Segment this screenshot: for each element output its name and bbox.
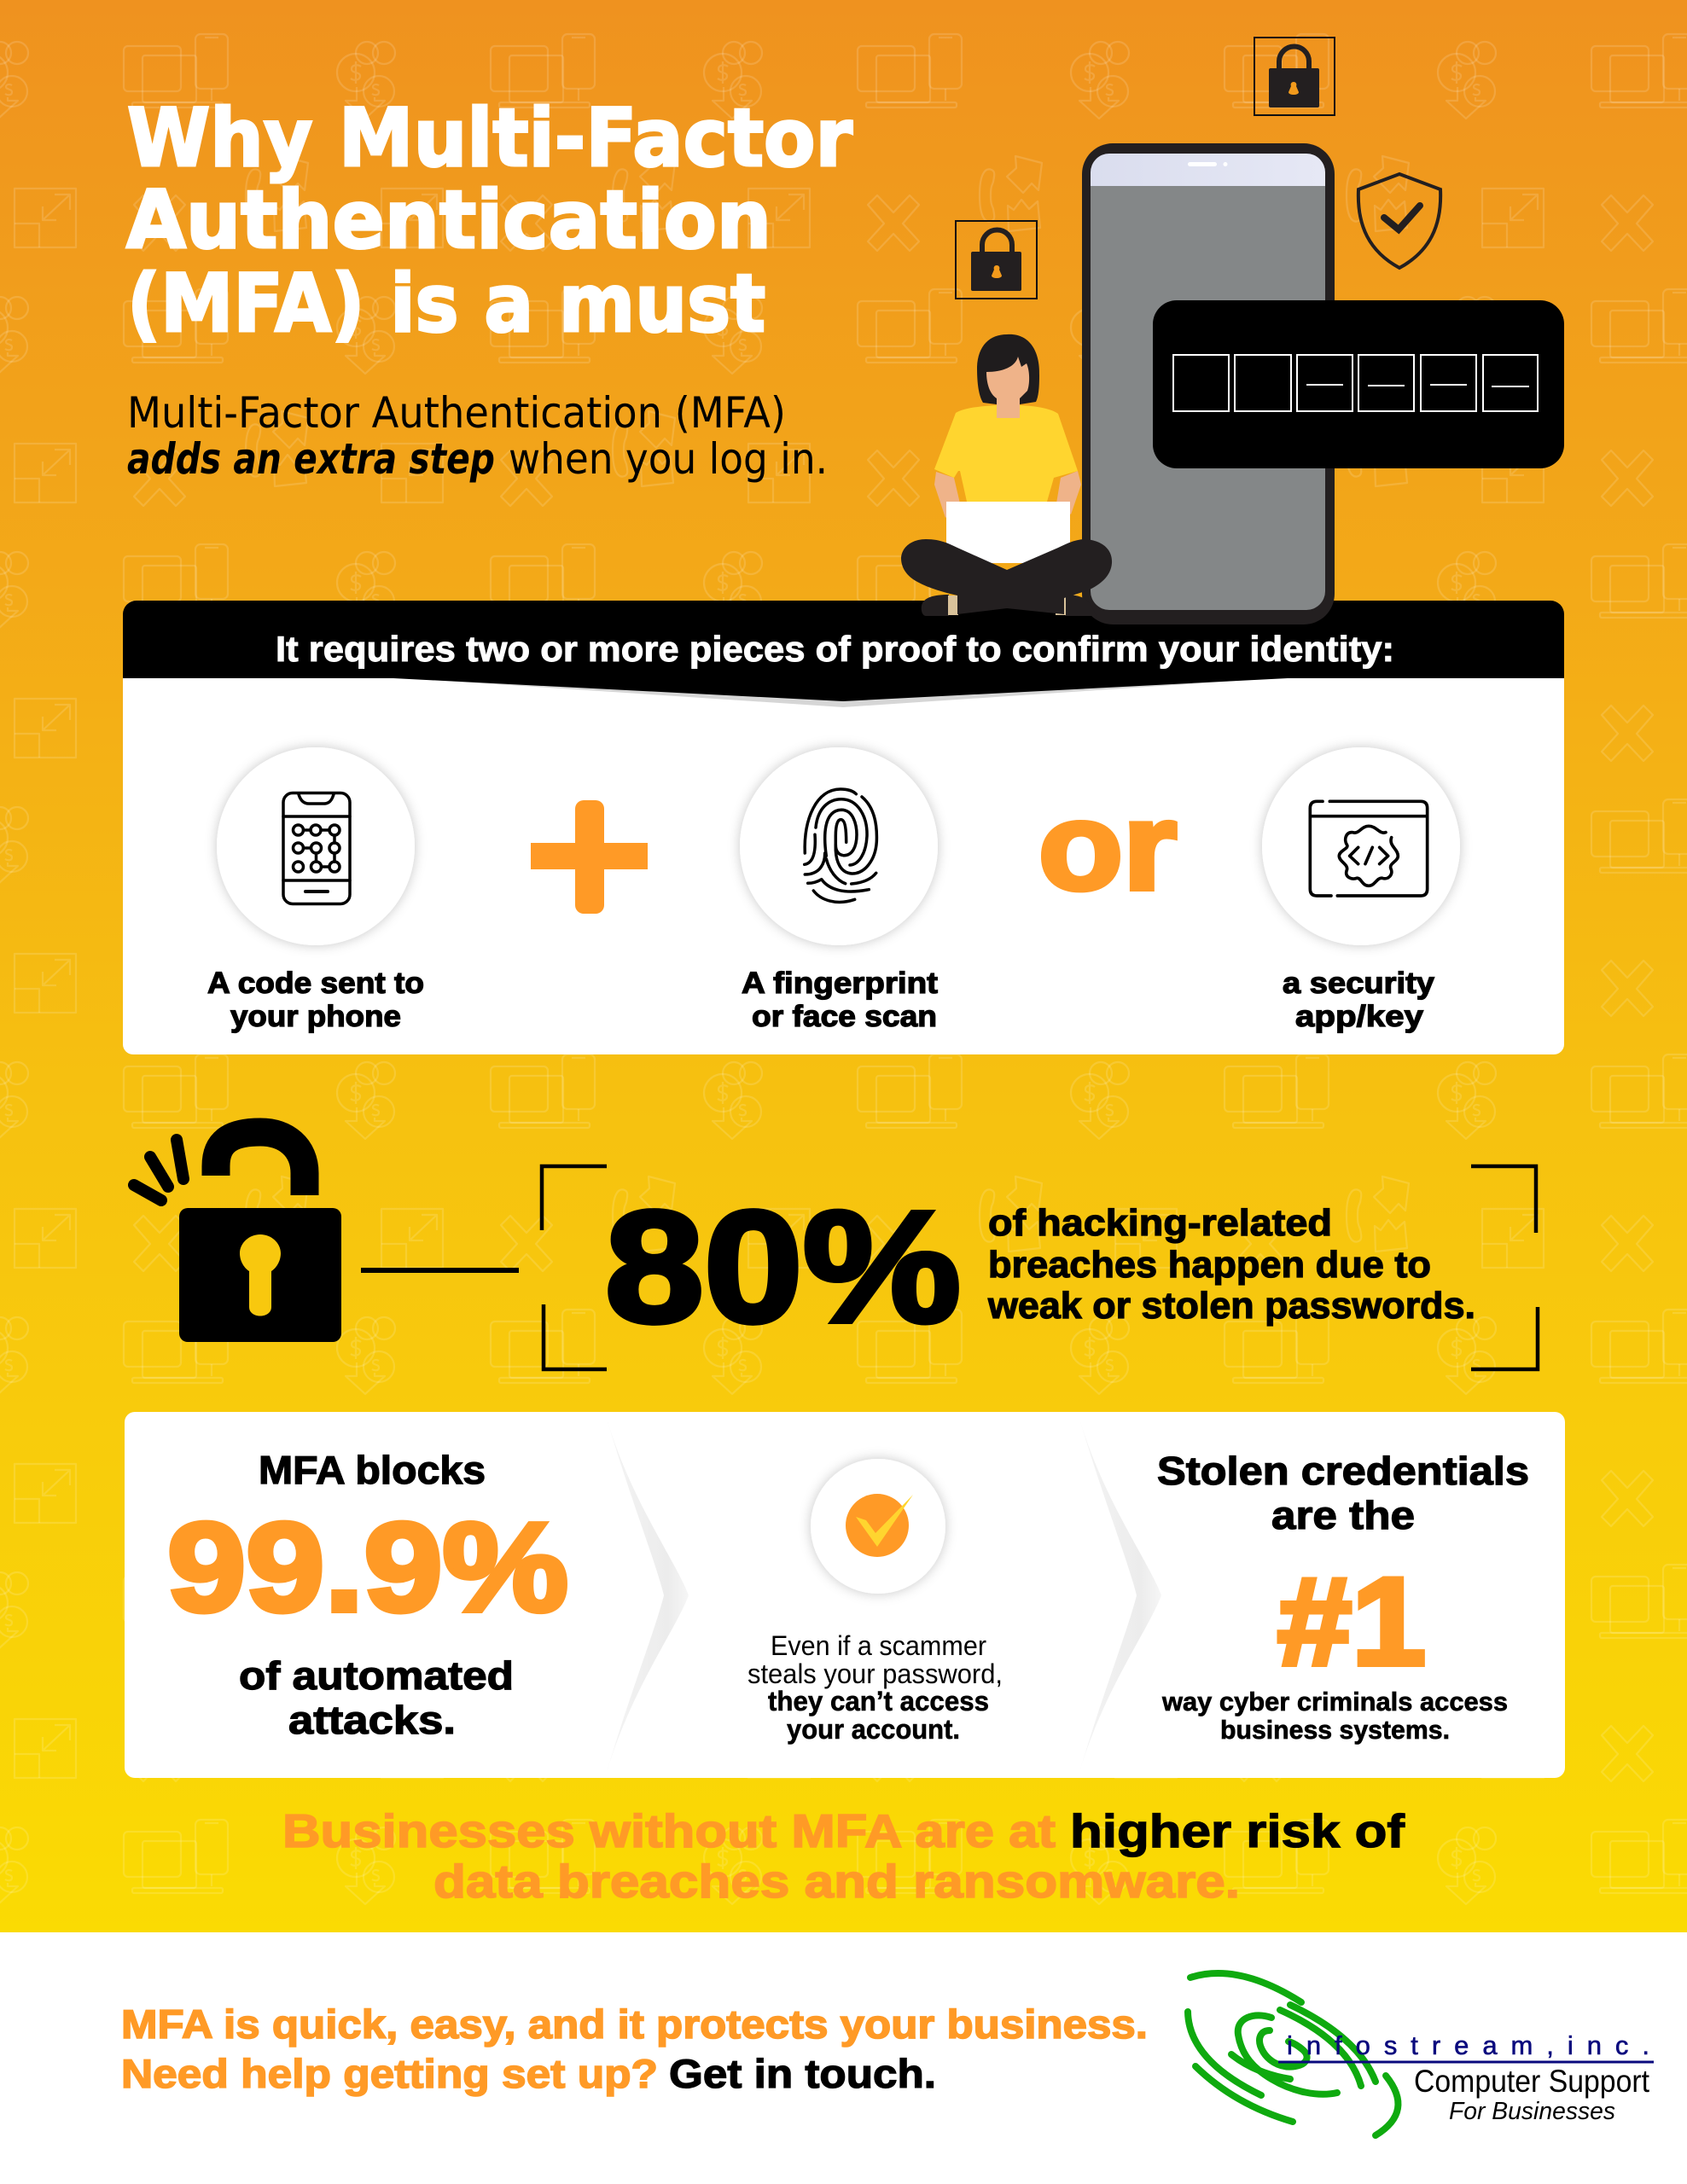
icon: padlock left [956, 221, 1037, 299]
stat: MFA blocks 99.9%: attacks. [288, 1698, 456, 1742]
stat: stolen credentials #1: Stolen credentials [1157, 1449, 1529, 1493]
stat text: hacking-related breaches: weak or stolen passwords. [987, 1285, 1475, 1327]
title: Why Multi-Factor [127, 92, 853, 185]
subtitle: adds an extra step [127, 434, 495, 484]
factor labels: your phone [230, 1000, 401, 1033]
stat: 80%: 80% [605, 1179, 961, 1356]
stat: MFA blocks 99.9%: MFA blocks [259, 1448, 486, 1492]
icon: padlock top [1254, 38, 1335, 115]
logo: infostream: For Businesses [1449, 2098, 1615, 2125]
stat: stolen credentials #1: #1 [1277, 1552, 1426, 1691]
illustration: phone [1082, 143, 1335, 624]
icon: fingerprint [805, 789, 876, 902]
factor: security app [1262, 747, 1460, 945]
callout: higher risk: Businesses without MFA are at [282, 1804, 1056, 1857]
stat text: hacking-related breaches [987, 1202, 1475, 1327]
stat: MFA blocks 99.9%: of automated [239, 1653, 514, 1698]
banner heading: It requires two or more pieces of proof to confirm your identity: [276, 629, 1394, 669]
footer call to action: MFA is quick, easy, and it protects your business. [121, 2001, 1148, 2047]
icon: open padlock [134, 1132, 341, 1342]
connector line [361, 1268, 519, 1273]
text: scammer: they can’t access [768, 1686, 989, 1716]
plus sign [531, 800, 648, 914]
factor labels: a security [1283, 967, 1435, 1000]
black banner [123, 601, 1564, 707]
factor labels: A code sent to [207, 967, 424, 1000]
stat text: hacking-related breaches: of hacking-related [988, 1202, 1332, 1244]
white panel: proof factors background [123, 665, 1564, 1054]
subtitle [127, 388, 828, 484]
stat: stolen credentials #1: are the [1271, 1493, 1415, 1537]
footer call to action [121, 2001, 1148, 2096]
icon: app window with code gear [1310, 801, 1428, 896]
factor labels [207, 967, 1435, 1033]
stat: stolen credentials #1: way cyber criminals access [1161, 1687, 1508, 1716]
logo swirl [1188, 1973, 1398, 2135]
footer call to action: Get in touch. [669, 2051, 936, 2096]
white panel: MFA stats [125, 1412, 1565, 1778]
title: Authentication [126, 174, 771, 267]
factor: fingerprint [740, 747, 938, 945]
title [126, 92, 853, 351]
footer panel [0, 1932, 1687, 2184]
factor labels: or face scan [752, 1000, 937, 1033]
arrow separator two [1079, 1419, 1161, 1772]
illustration: code entry panel [1153, 300, 1564, 468]
factor labels: A fingerprint [742, 967, 938, 1000]
text: scammer: steals your password, [748, 1658, 1003, 1689]
callout: higher risk: higher risk of [1070, 1804, 1405, 1857]
title: (MFA) is a must [127, 258, 765, 351]
icon: check in circle [811, 1459, 945, 1594]
stat: stolen credentials #1 [1157, 1449, 1529, 1745]
logo: infostream: infostream,inc. [1287, 2030, 1649, 2060]
icon: shield with check [1358, 174, 1440, 268]
stat: stolen credentials #1: business systems. [1220, 1715, 1450, 1745]
word: or: or [1038, 777, 1177, 915]
stat text: hacking-related breaches: breaches happen due to [988, 1244, 1431, 1286]
arrow separator one [607, 1419, 689, 1772]
logo: infostream [1188, 1973, 1654, 2135]
illustration: woman with laptop [901, 334, 1112, 616]
corner brackets [542, 1166, 1538, 1369]
factor labels: app/key [1295, 1000, 1424, 1033]
stat: MFA blocks 99.9%: 99.9% [167, 1497, 568, 1638]
stat: MFA blocks 99.9% [167, 1448, 568, 1742]
footer call to action: Need help getting set up? [121, 2051, 658, 2096]
icon: phone with pattern [283, 793, 350, 904]
subtitle: Multi-Factor Authentication (MFA) [127, 388, 786, 438]
text: scammer [748, 1630, 1003, 1745]
logo: infostream: Computer Support [1414, 2064, 1650, 2099]
callout: higher risk: data breaches and ransomware. [433, 1855, 1240, 1908]
text: scammer: your account. [787, 1714, 960, 1745]
text: scammer: Even if a scammer [771, 1630, 986, 1661]
factor: code sent to phone [217, 747, 415, 945]
callout: higher risk [282, 1804, 1405, 1908]
subtitle: when you log in. [509, 434, 828, 484]
